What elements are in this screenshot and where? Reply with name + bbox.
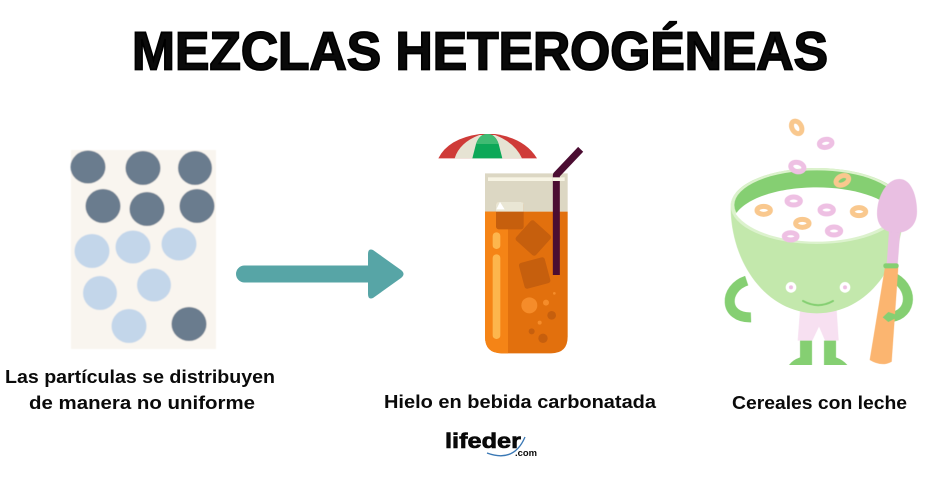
dark particles (70, 150, 214, 341)
logo: lifeder.com: .com (515, 448, 537, 459)
text: soda caption: Hielo en bebida carbonatada (384, 392, 657, 412)
highlights (493, 232, 500, 249)
text: particles caption (5, 367, 275, 413)
logo: lifeder.com (445, 430, 537, 459)
cereal rings (757, 119, 866, 240)
text: particles caption: Las partículas se distribuyen (5, 367, 275, 387)
arrow (236, 250, 404, 298)
text: particles caption: de manera no uniforme (29, 393, 255, 413)
ice cubes (496, 202, 524, 229)
legs (789, 310, 847, 365)
title: MEZCLAS HETEROGÉNEAS (132, 22, 828, 82)
icon: soda glass with umbrella (438, 134, 581, 353)
bubbles (521, 297, 537, 313)
spoon (870, 179, 917, 364)
glass (485, 149, 581, 353)
icon: cereal bowl character (730, 119, 917, 365)
panel: particles diagram (70, 150, 216, 349)
text: cereal caption: Cereales con leche (732, 393, 907, 413)
light particles (74, 228, 196, 343)
logo: lifeder.com: lifeder (445, 430, 521, 453)
bowl (731, 168, 904, 313)
umbrella (438, 134, 537, 158)
face (786, 282, 850, 305)
arms (730, 278, 908, 317)
straw (556, 149, 581, 275)
